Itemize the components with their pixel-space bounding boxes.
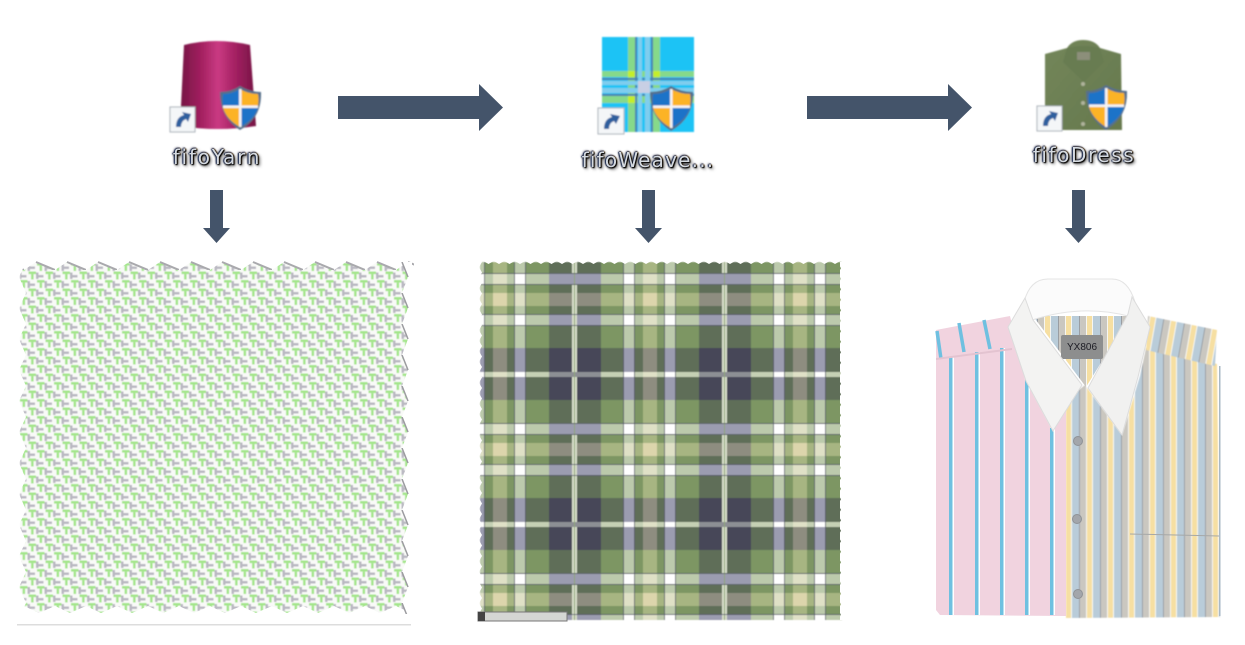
arrow: dress down xyxy=(1065,190,1092,243)
fabric: green plaid xyxy=(476,258,846,621)
shirt right collar xyxy=(1088,297,1150,435)
icon: shortcut badge xyxy=(170,107,195,132)
icon: shortcut badge xyxy=(1037,106,1062,131)
shirt label tag: YX806 xyxy=(1067,342,1097,353)
shirt back collar xyxy=(1024,279,1135,320)
shirt: folded striped shirt xyxy=(936,279,1220,618)
shirt right body xyxy=(1066,348,1220,618)
shirt pocket line xyxy=(1130,534,1219,536)
icon: security shield xyxy=(1086,85,1127,130)
arrow: yarn down xyxy=(203,190,230,243)
label: fifoWeave: fifoWeave... xyxy=(582,148,714,172)
shirt left collar xyxy=(1008,298,1082,431)
shirt left pink body xyxy=(936,316,1066,616)
fabric: green and grey woven lattice xyxy=(14,258,414,626)
arrow: weave to dress xyxy=(807,84,972,131)
icon: security shield xyxy=(650,86,693,131)
label: fifoDress: fifoDress xyxy=(1033,143,1135,167)
icon: olive shirt xyxy=(1037,40,1127,131)
icon: security shield xyxy=(220,86,261,130)
label: fifoYarn: fifoYarn xyxy=(173,145,261,169)
shirt buttons xyxy=(1072,436,1082,598)
status bar xyxy=(478,612,567,621)
arrow: yarn to weave xyxy=(338,84,503,131)
icon: shortcut badge xyxy=(598,108,624,134)
shirt right shoulder yoke xyxy=(1146,316,1217,366)
icon: plaid swatch xyxy=(598,37,694,134)
arrow: weave down xyxy=(635,190,662,243)
icon: yarn cone xyxy=(170,41,261,132)
shirt neck inner xyxy=(1033,316,1130,387)
shirt label tag xyxy=(1061,335,1103,359)
